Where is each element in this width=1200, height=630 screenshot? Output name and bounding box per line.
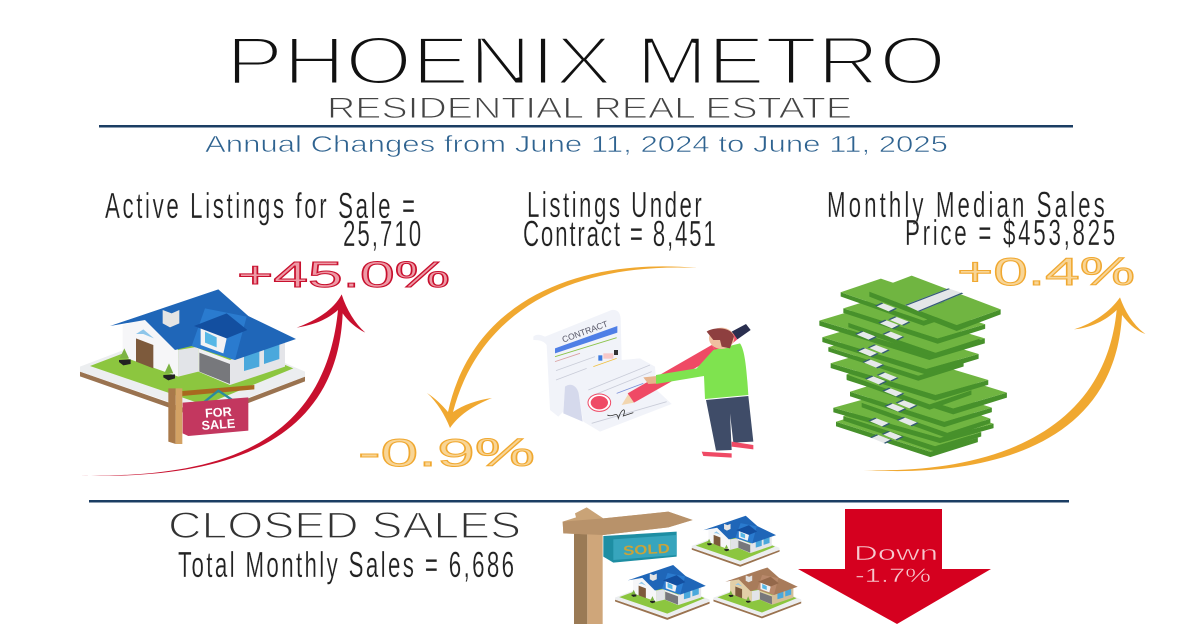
- stat: -0.9%: -0.9%: [358, 432, 535, 475]
- stat: +45.0%: +45.0%: [237, 254, 450, 295]
- icon: house for sale: FOR: [205, 405, 232, 421]
- heading: median price: Price = $453,825: [905, 214, 1115, 253]
- heading: under contract: Contract = 8,451: [523, 215, 716, 254]
- arrow: red down with label: [798, 509, 991, 624]
- arrow: red down with label: Down: [854, 543, 938, 565]
- arrow: red down with label: -1.7%: [855, 566, 931, 587]
- icon: house for sale: SALE: [201, 417, 236, 433]
- icon: contract and person: [533, 310, 753, 458]
- subtitle: RESIDENTIAL REAL ESTATE: [327, 92, 852, 125]
- arrow: red up: [82, 294, 365, 476]
- heading: median price: [827, 186, 1115, 253]
- date range: Annual Changes from June 11, 2024 to June 11, 2025: [205, 131, 948, 157]
- icon: sold sign and houses: [563, 507, 801, 624]
- heading: under contract: Listings Under: [527, 186, 702, 225]
- icon: stack of money: [819, 276, 1007, 457]
- heading: under contract: [523, 186, 716, 254]
- arrow: orange up: [863, 297, 1145, 471]
- arrow: orange down: [427, 266, 697, 428]
- text: total monthly sales: Total Monthly Sales = 6,686: [178, 546, 514, 585]
- heading: active listings: 25,710: [343, 215, 421, 254]
- heading: active listings: [105, 187, 421, 254]
- heading: median price: Monthly Median Sales: [827, 186, 1105, 225]
- title: PHOENIX METRO: [226, 23, 946, 99]
- icon: house for sale: [80, 289, 305, 444]
- stat: +0.4%: +0.4%: [957, 251, 1135, 294]
- icon: contract and person: CONTRACT: [561, 318, 610, 345]
- icon: sold sign and houses: SOLD: [623, 541, 671, 558]
- heading: closed sales: CLOSED SALES: [168, 505, 521, 546]
- heading: active listings: Active Listings for Sale =: [105, 187, 415, 226]
